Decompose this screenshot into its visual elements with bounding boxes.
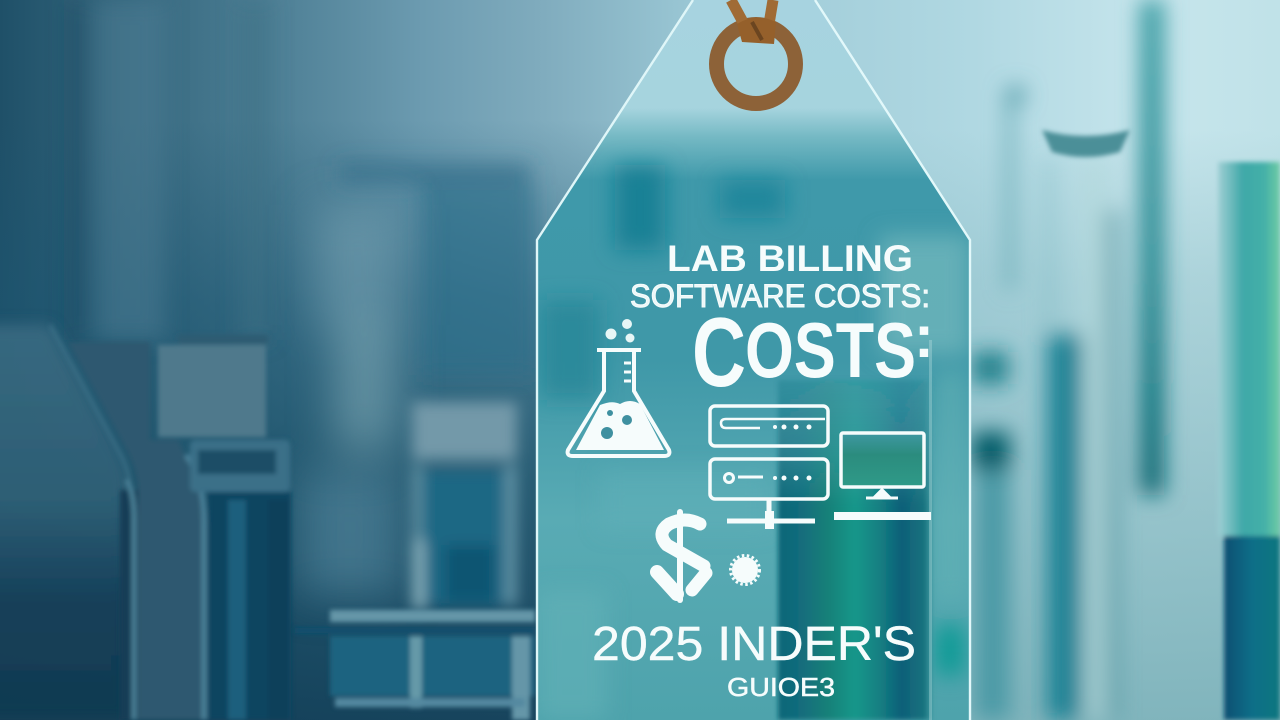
subtitle: software costs: SOFTWARE COSTS: (630, 278, 930, 314)
text: year and insider's: 2025 INDER'S (592, 618, 916, 671)
left bottle body (0, 325, 130, 720)
text: guide: GUIOE3 (727, 672, 835, 702)
title: lab billing: LAB BILLING (667, 238, 913, 279)
icon: brown cord and ring (716, 0, 796, 104)
second jar (412, 402, 517, 460)
icon: flask (568, 319, 669, 456)
heading: costs: : (914, 303, 934, 370)
heading: costs: OSTS (745, 306, 916, 394)
right cylinder (1042, 130, 1130, 157)
icon: monitor and keyboard (834, 433, 931, 520)
icon: server stack (710, 406, 828, 529)
shelf (330, 610, 535, 622)
heading: costs (692, 297, 934, 407)
blurred columns right (1140, 0, 1164, 495)
bottles left (50, 325, 130, 490)
icon: dollar sign (657, 512, 706, 600)
icon: gear badge (730, 556, 760, 584)
heading: costs: C (692, 297, 746, 407)
panel: glass price tag (537, 0, 970, 720)
